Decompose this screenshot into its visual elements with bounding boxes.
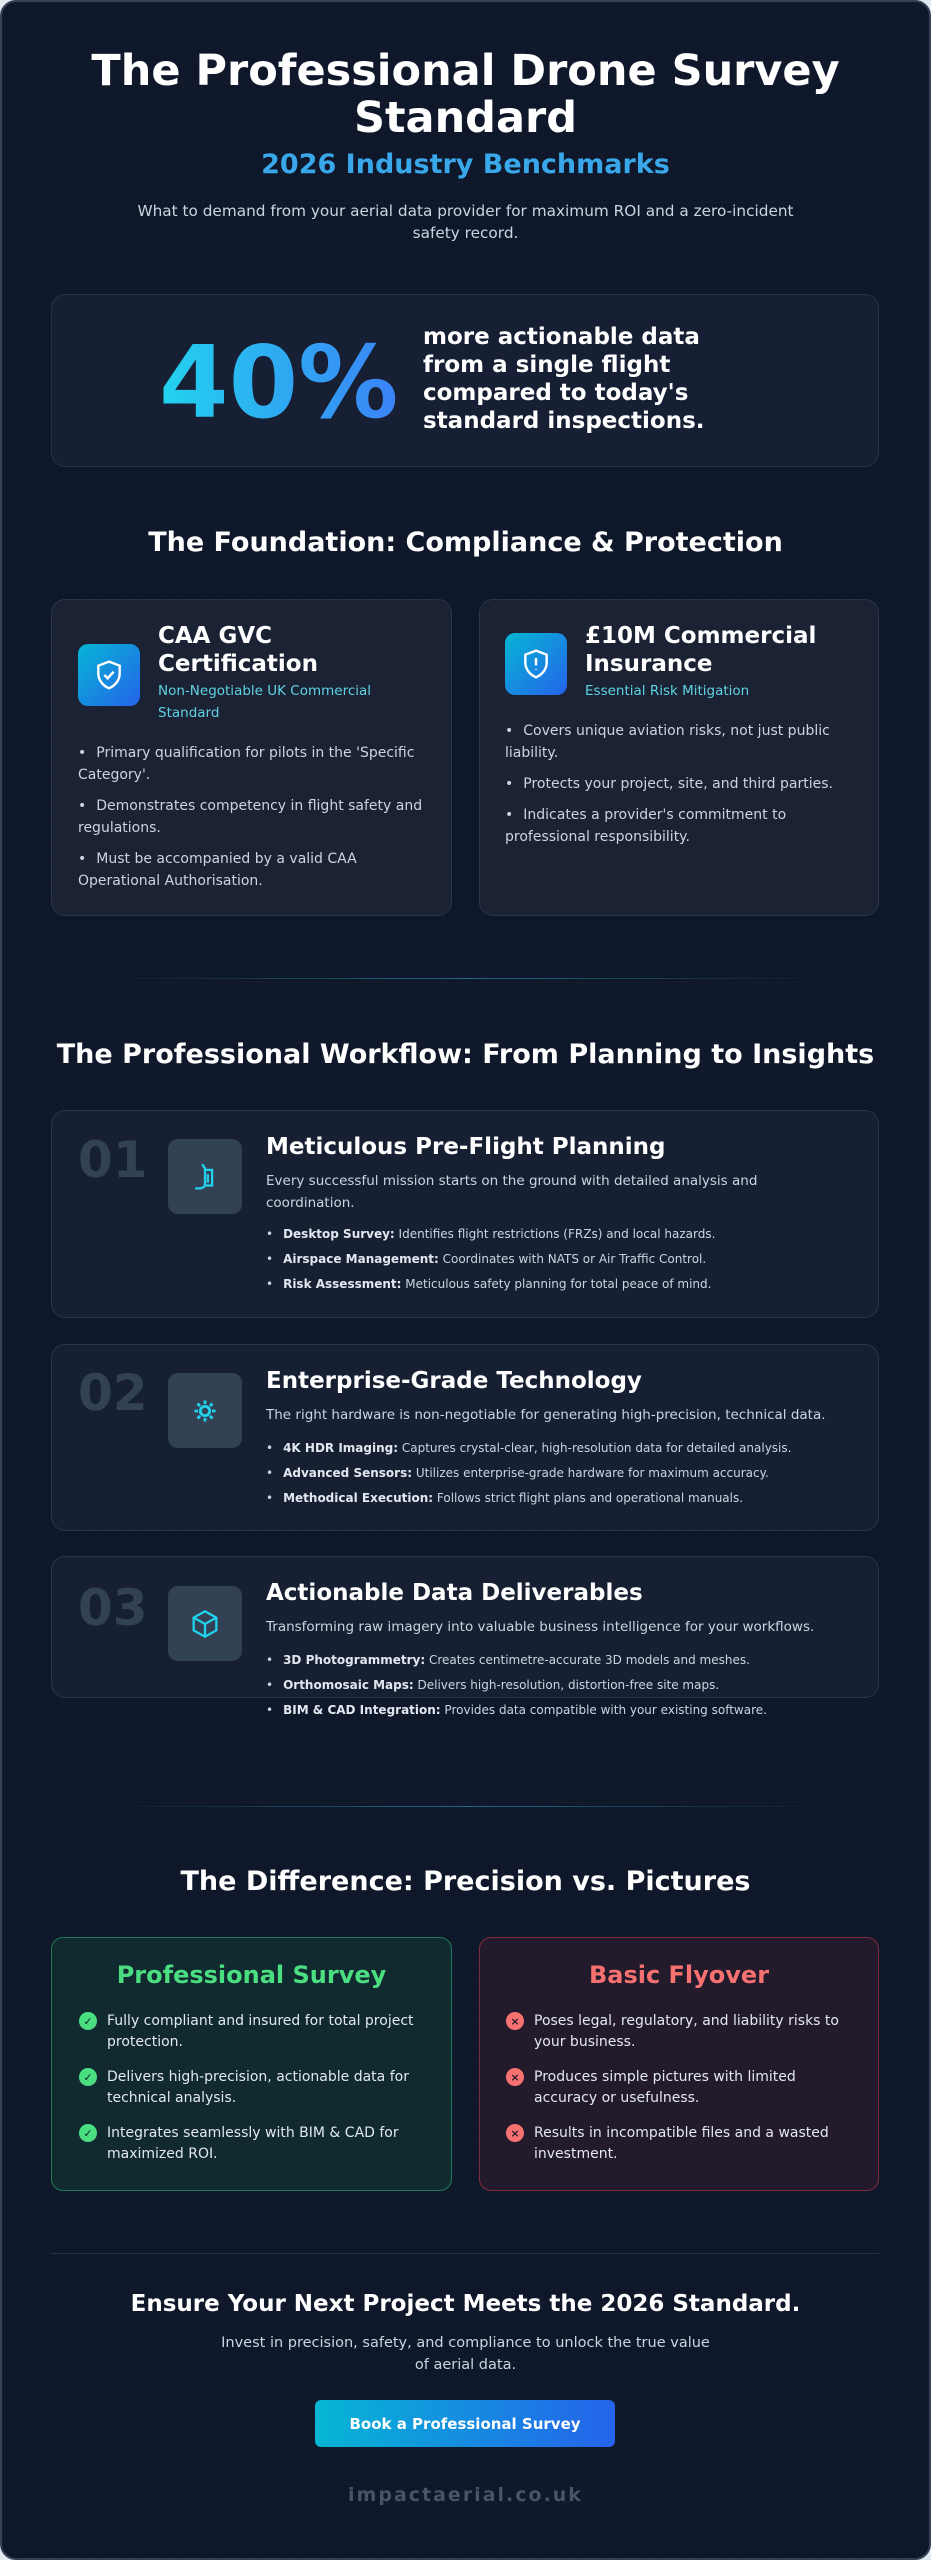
bullets [268,1441,791,1505]
card title: CAA GVC [158,623,272,649]
list: Produces simple pictures with limited accuracy or usefulness. [534,2069,796,2106]
title: Actionable Data Deliverables [266,1580,643,1606]
number: 03 [78,1579,148,1637]
list: × [510,2126,520,2140]
bullets: 3D Photogrammetry: Creates centimetre-accurate 3D models and meshes. [283,1653,750,1667]
bullets [78,745,422,889]
panel: basic flyover [479,1937,879,2191]
card title: £10M Commercial [585,623,816,649]
number: 01 [78,1131,148,1189]
CTA text: Invest in precision, safety, and compliance to unlock the true value of aerial data. [221,2335,710,2373]
bullets: Airspace Management: Coordinates with NATS or Air Traffic Control. [283,1252,706,1266]
title [91,46,840,143]
title: Enterprise-Grade Technology [266,1368,642,1394]
icon: shield check [78,644,140,706]
heading: workflow: The Professional Workflow: From Planning to Insights [57,1039,874,1070]
stat text: standard inspections. [423,408,705,434]
heading: difference: The Difference: Precision vs. Pictures [181,1866,750,1897]
bullets [268,1653,767,1717]
stat text: more actionable data [423,324,700,350]
title: Meticulous Pre-Flight Planning [266,1134,666,1160]
bullets: Demonstrates competency in flight safety and regulations. [78,798,422,836]
number: 02 [78,1364,148,1422]
list: Integrates seamlessly with BIM & CAD for maximized ROI. [107,2125,399,2162]
stat text: from a single flight [423,352,670,378]
bullets: BIM & CAD Integration: Provides data compatible with your existing software. [283,1703,767,1717]
list [79,2012,414,2162]
stat number: 40% [159,324,398,441]
bullets [268,1227,715,1291]
title: Standard [354,93,577,143]
bullets: Methodical Execution: Follows strict flight plans and operational manuals. [283,1491,743,1505]
description: The right hardware is non-negotiable for generating high-precision, technical data. [266,1407,826,1423]
list: × [510,2070,520,2084]
step 02 [51,1344,879,1531]
list: Fully compliant and insured for total project protection. [107,2013,414,2050]
bullets: Advanced Sensors: Utilizes enterprise-grade hardware for maximum accuracy. [283,1466,769,1480]
list: × [510,2014,520,2028]
card title [585,623,816,677]
stat text: compared to today's [423,380,688,406]
card title [158,623,318,677]
card subtitle: Essential Risk Mitigation [585,683,749,699]
step 03 [51,1556,879,1698]
title: The Professional Drone Survey [91,46,840,96]
bullets: Protects your project, site, and third parties. [523,776,833,792]
list: Delivers high-precision, actionable data for technical analysis. [107,2069,409,2106]
heading: foundation: The Foundation: Compliance & Protection [148,527,783,558]
icon: cube [168,1586,242,1661]
title: Basic Flyover [589,1961,769,1989]
list: Results in incompatible files and a wasted investment. [534,2125,829,2162]
bullets: Risk Assessment: Meticulous safety planning for total peace of mind. [283,1277,711,1291]
title: Professional Survey [117,1961,386,1989]
description: Every successful mission starts on the ground with detailed analysis and coordination. [266,1173,757,1211]
card subtitle: Non-Negotiable UK Commercial Standard [158,683,371,721]
bullets: Orthomosaic Maps: Delivers high-resolution, distortion-free site maps. [283,1678,719,1692]
icon: gear [168,1373,242,1448]
panel: insurance [479,599,879,916]
bullets: Desktop Survey: Identifies flight restrictions (FRZs) and local hazards. [283,1227,715,1241]
panel: professional survey [51,1937,452,2191]
list: ✓ [83,2014,93,2028]
list: Poses legal, regulatory, and liability risks to your business. [534,2013,839,2050]
list [506,2012,839,2162]
panel: CAA GVC [51,599,452,916]
bullets: Must be accompanied by a valid CAA Operational Authorisation. [78,851,357,889]
bullets: Indicates a provider's commitment to professional responsibility. [505,807,786,845]
stat panel [51,294,879,467]
bullets: 4K HDR Imaging: Captures crystal-clear, high-resolution data for detailed analysis. [283,1441,791,1455]
bullets [505,723,833,845]
CTA button [315,2400,615,2447]
description: Transforming raw imagery into valuable business intelligence for your workflows. [266,1619,814,1635]
card title: Insurance [585,651,712,677]
card title: Certification [158,651,318,677]
CTA button: Book a Professional Survey [349,2414,581,2432]
step 01 [51,1110,879,1318]
icon: shield alert [505,633,567,695]
bullets: Covers unique aviation risks, not just public liability. [505,723,830,761]
bullets: Primary qualification for pilots in the 'Specific Category'. [78,745,414,783]
list: ✓ [83,2070,93,2084]
CTA heading: Ensure Your Next Project Meets the 2026 Standard. [131,2291,800,2317]
intro text: What to demand from your aerial data provider for maximum ROI and a zero-incident safety record. [137,202,794,242]
subtitle: 2026 Industry Benchmarks [261,149,670,180]
footer: impactaerial.co.uk [348,2484,583,2506]
icon: planning [168,1139,242,1214]
stat text [423,324,705,434]
list: ✓ [83,2126,93,2140]
